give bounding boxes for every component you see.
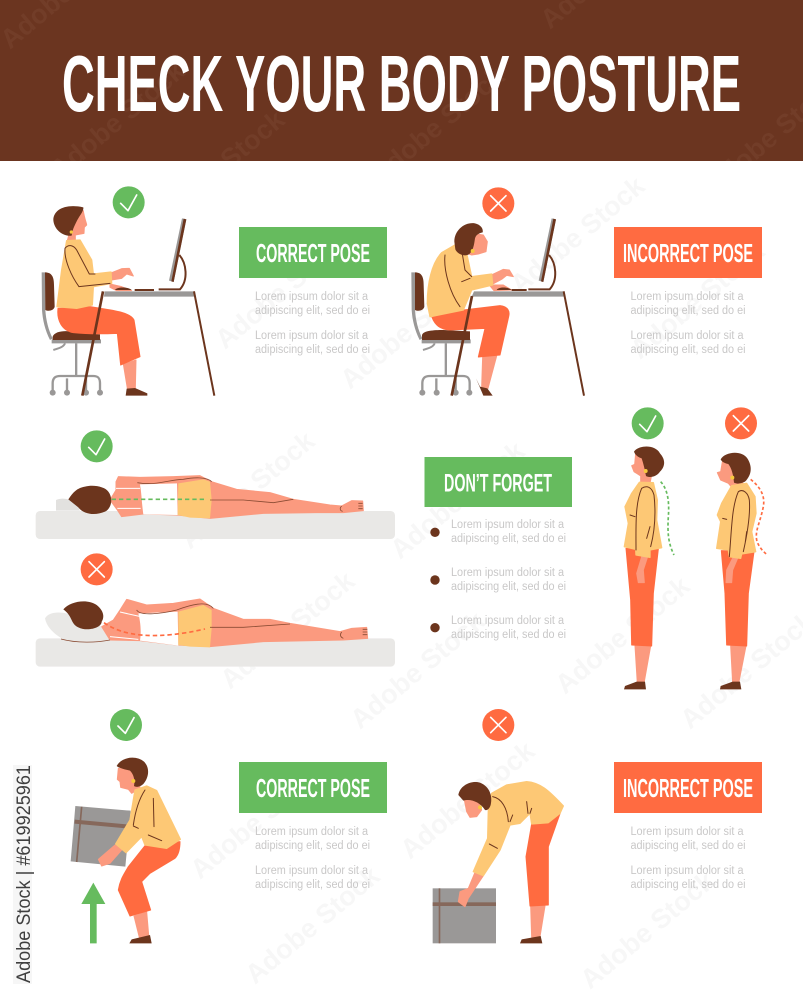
heading [424,457,572,507]
text block: adipiscing elit, sed do ei [255,840,370,852]
icon: check badge [113,186,145,218]
text: Adobe Stock [395,735,541,865]
mattress [36,511,395,539]
text: Adobe Stock [175,425,321,555]
text block: adipiscing elit, sed do ei [630,840,746,852]
box being lifted [71,806,131,867]
figure: correct lifting pose [71,709,180,943]
text: Adobe Stock [345,605,491,735]
bullet 2: adipiscing elit, sed do ei [451,581,566,593]
heading [239,227,387,278]
text block [630,826,746,891]
bullet 1: Lorem ipsum dolor sit a [451,519,565,531]
text block: Lorem ipsum dolor sit a [630,826,744,838]
heading: CORRECT POSE [256,238,370,268]
box on floor [433,888,496,943]
text block: adipiscing elit, sed do ei [630,305,746,317]
arrow: lift upward [81,883,105,943]
text block [630,291,746,356]
text block [255,826,370,891]
text block: adipiscing elit, sed do ei [255,879,370,891]
icon: cross badge [725,407,757,439]
bullet 3: Lorem ipsum dolor sit a [451,615,565,627]
panel: incorrect lifting label [614,762,762,891]
incorrect standing woman [717,453,767,689]
woman seated upright [53,206,147,396]
header banner [0,0,803,200]
text block: adipiscing elit, sed do ei [630,879,746,891]
icon: cross badge [482,709,514,741]
icon: check badge [632,407,664,439]
figure: standing poses [624,407,767,689]
incorrect sleeper [45,599,368,647]
woman slouching forward [427,223,513,396]
text block: Lorem ipsum dolor sit a [255,865,369,877]
panel: correct pose label [239,227,387,356]
figure: incorrect lifting pose [433,709,563,943]
office chair [42,272,103,396]
text block: Lorem ipsum dolor sit a [255,291,369,303]
bullet 2: Lorem ipsum dolor sit a [451,567,565,579]
text: Adobe Stock [550,570,696,700]
correct sleeper [56,476,363,518]
figure: sleeping poses [36,430,395,667]
text: Adobe Stock [505,170,651,300]
woman bending at the waist [458,782,563,943]
text block [255,291,370,356]
text: Adobe Stock [335,265,481,395]
icon: check badge [81,430,113,462]
office chair [411,272,472,396]
text: Adobe Stock [210,225,356,355]
panel: correct lifting label [239,762,387,891]
header banner: Stock [215,104,291,175]
text: Adobe Stock [215,565,361,695]
bullet 3: adipiscing elit, sed do ei [451,629,566,641]
text: Adobe Stock [575,865,721,995]
text block: adipiscing elit, sed do ei [255,344,370,356]
text: Adobe Stock [240,860,386,990]
panel: incorrect pose label [614,227,762,356]
heading [614,227,762,278]
desk with monitor and keyboard [452,218,584,396]
text block: adipiscing elit, sed do ei [255,305,370,317]
text block: Lorem ipsum dolor sit a [255,826,369,838]
panel: don't forget [424,457,572,641]
desk with monitor and keyboard [82,218,214,396]
heading: CORRECT POSE [256,773,370,803]
header banner: Adobe Stock [365,60,511,190]
figure: correct sitting pose at desk [42,186,214,396]
bullet 2 [430,567,566,593]
text: Adobe Stock [185,755,331,885]
mattress [36,638,395,667]
icon: cross badge [81,553,113,585]
bullet 3 [430,615,566,641]
header banner: Adobe Stock [45,55,191,185]
heading: DON’T FORGET [444,470,552,498]
text block: Lorem ipsum dolor sit a [630,291,744,303]
bullet 1: adipiscing elit, sed do ei [451,533,566,545]
stock image id: Adobe Stock | #619925961 [14,765,35,983]
icon: cross badge [482,187,514,219]
heading [614,762,762,813]
correct standing woman [624,446,674,689]
text: Adobe Stock [385,435,531,565]
bullet 1 [430,519,566,545]
text block: Lorem ipsum dolor sit a [630,330,744,342]
icon: check badge [110,709,142,741]
text block: adipiscing elit, sed do ei [630,344,746,356]
figure: incorrect sitting pose at desk [411,187,584,396]
woman lifting with bent knees [98,758,180,943]
text: Adobe Stock [625,235,771,365]
text block: Lorem ipsum dolor sit a [255,330,369,342]
text block: Lorem ipsum dolor sit a [630,865,744,877]
heading [239,762,387,813]
